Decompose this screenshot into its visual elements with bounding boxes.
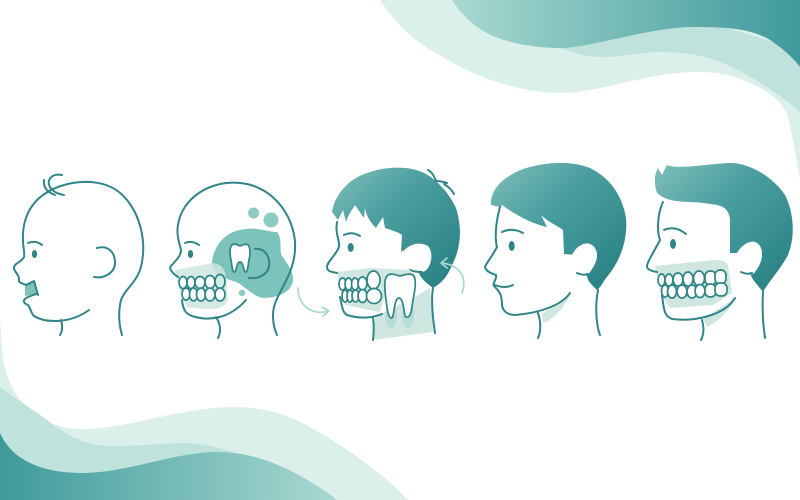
- brow: [664, 228, 686, 234]
- eye: [348, 243, 354, 252]
- ear: [737, 242, 762, 274]
- hair curl: [44, 175, 64, 195]
- baby eye: [32, 250, 37, 258]
- brow: [28, 242, 42, 245]
- ear: [94, 247, 115, 277]
- brow: [502, 230, 523, 233]
- face outline: [327, 222, 435, 340]
- teeth: [179, 274, 225, 301]
- hair: [332, 168, 460, 288]
- brow: [185, 242, 199, 245]
- top-right wave decoration: [380, 0, 800, 180]
- face outline: [647, 202, 765, 340]
- baby head outline: [14, 182, 143, 335]
- large tooth: [385, 274, 415, 318]
- eye: [670, 239, 676, 249]
- gum area: [655, 260, 732, 308]
- blob behind tooth: [212, 229, 293, 298]
- bubbles: [239, 208, 278, 296]
- ear: [401, 244, 431, 273]
- ear: [249, 249, 269, 278]
- hair: [655, 163, 793, 292]
- open mouth: [25, 281, 37, 296]
- head 4: young adult face: [485, 163, 626, 338]
- gum area: [175, 263, 228, 309]
- brow: [344, 233, 360, 236]
- smile: [495, 285, 513, 287]
- gum area: [337, 268, 417, 312]
- head 2: child with primary teeth: [170, 183, 295, 338]
- eye: [188, 250, 193, 258]
- ear: [572, 243, 597, 274]
- neck shading: [542, 295, 570, 323]
- head 5: adult with full teeth: [647, 163, 793, 340]
- hair tufts: [428, 170, 454, 194]
- tooth icon: [230, 244, 250, 272]
- neck shading: [373, 288, 433, 340]
- face outline: [485, 207, 600, 338]
- head outline: [170, 183, 295, 338]
- small teeth and molar: [339, 271, 382, 304]
- hair: [491, 163, 626, 290]
- arrow: child to teen: [298, 288, 329, 316]
- root shading: [385, 304, 414, 328]
- arrow: back of head: [441, 258, 464, 293]
- full teeth: [658, 270, 727, 298]
- head 3: teen with mixed dentition: [327, 168, 460, 340]
- neck shading: [703, 298, 735, 327]
- bottom-left wave decoration: [0, 318, 408, 500]
- eye: [509, 241, 515, 251]
- head 1: baby with no teeth: [14, 175, 143, 335]
